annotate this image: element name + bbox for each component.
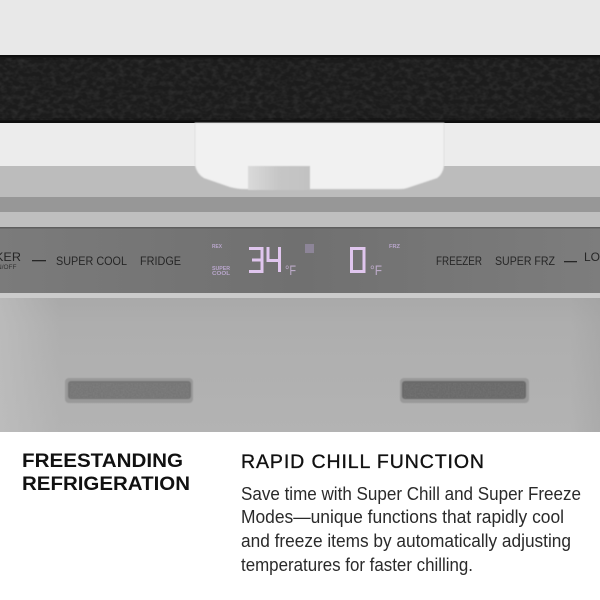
panel labels right: FREEZER	[436, 254, 482, 268]
right slot	[400, 378, 529, 403]
freezer temperature 0	[352, 248, 364, 272]
panel labels right: LO	[584, 250, 600, 264]
lower trim strip	[0, 293, 600, 298]
grey shelf area	[0, 166, 600, 197]
body description	[241, 483, 581, 575]
black textured handle band	[0, 55, 600, 123]
lower drawer area	[0, 298, 600, 432]
white caption area	[0, 432, 600, 600]
light trim strip	[0, 212, 600, 227]
LCD display	[212, 244, 401, 278]
small indicators: REX	[212, 244, 222, 250]
heading: rapid chill function: RAPID CHILL FUNCTION	[241, 451, 484, 473]
panel labels left: SUPER COOL	[56, 254, 127, 268]
control panel	[0, 227, 600, 293]
LCD display: °F	[285, 262, 296, 278]
dark recess strip	[0, 197, 600, 212]
small indicators: FRZ	[389, 244, 401, 250]
body description: and freeze items by automatically adjusting	[241, 530, 571, 551]
lower door surface	[0, 122, 600, 166]
panel labels left	[0, 250, 181, 271]
panel labels left: FRIDGE	[140, 254, 181, 268]
panel labels right	[436, 250, 600, 268]
body description: Save time with Super Chill and Super Freeze	[241, 483, 581, 504]
left slot	[65, 378, 193, 403]
body description: Modes—unique functions that rapidly cool	[241, 506, 564, 527]
heading: freestanding refrigeration: REFRIGERATION	[22, 474, 190, 495]
small indicators	[212, 244, 401, 277]
refrigerator photo	[0, 0, 600, 432]
small indicators: COOL	[212, 271, 231, 277]
upper door surface	[0, 0, 600, 56]
LCD display: °F	[370, 262, 382, 278]
heading: freestanding refrigeration: FREESTANDING	[22, 451, 183, 472]
panel labels right: SUPER FRZ	[495, 254, 555, 268]
body description: temperatures for faster chilling.	[241, 554, 473, 575]
white hinge bracket	[195, 123, 444, 190]
heading: freestanding refrigeration	[22, 451, 190, 495]
fridge temperature 34	[249, 247, 280, 272]
small indicators: SUPER	[212, 266, 230, 272]
